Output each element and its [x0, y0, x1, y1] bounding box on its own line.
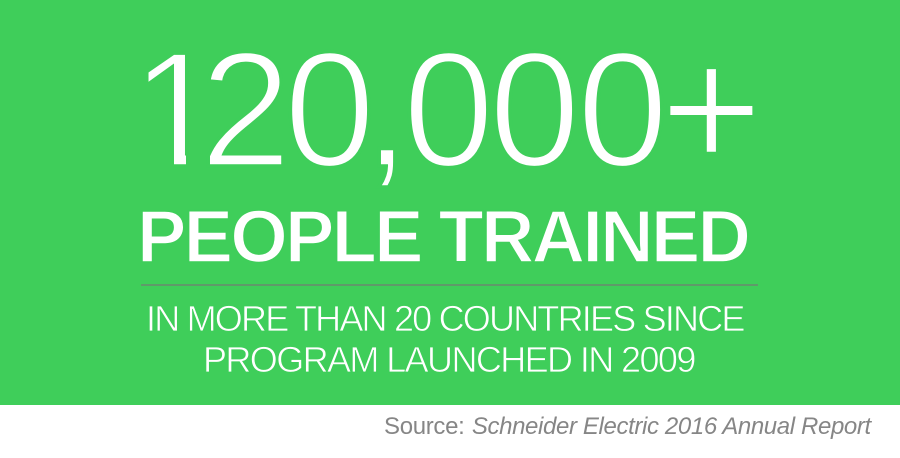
main figure: 120,000+: 0: [489, 18, 580, 201]
main figure: 120,000+: +: [660, 11, 763, 207]
main figure: 120,000+: ,: [364, 18, 410, 201]
heading: people trained: PEOPLE TRAINED: [137, 195, 748, 278]
divider line: [141, 284, 758, 286]
main figure: 120,000+: 2: [200, 18, 291, 201]
subtext: countries and program launch: PROGRAM LAUNCHED IN 2009: [203, 339, 695, 380]
subtext: countries and program launch: IN MORE THAN 20 COUNTRIES SINCE: [146, 298, 744, 339]
main figure: 120,000+: 0: [403, 18, 494, 201]
main figure: 120,000+: 0: [284, 18, 375, 201]
main figure: 120,000+: [131, 11, 763, 207]
main figure: 120,000+: 1: [131, 18, 222, 201]
subtext: countries and program launch: [146, 298, 744, 380]
main figure: 120,000+: 0: [577, 18, 668, 201]
source note: Source: Schneider Electric 2016 Annual Report: [384, 413, 871, 440]
